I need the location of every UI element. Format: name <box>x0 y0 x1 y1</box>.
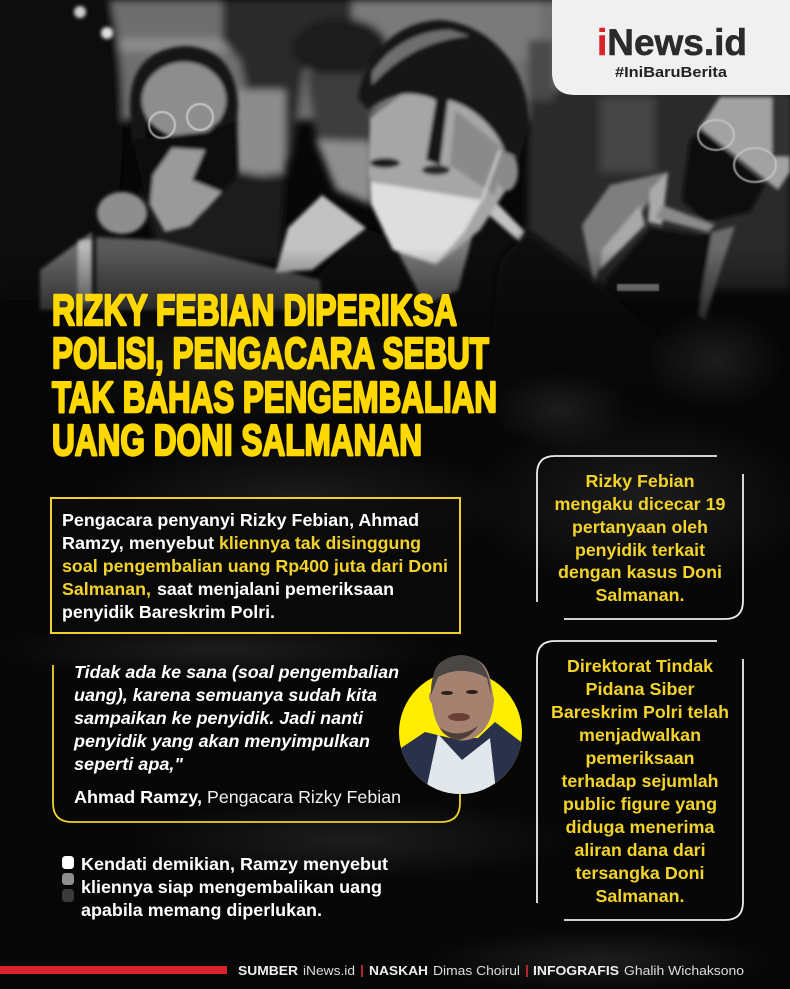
panel: scheduled examinations: Direktorat Tindak <box>567 656 713 676</box>
right person's dark shirt <box>606 228 715 300</box>
panel: scheduled examinations: terhadap sejumlah <box>562 771 718 791</box>
second man's hair and face <box>292 18 388 78</box>
panel: intro summary <box>51 498 460 633</box>
collar <box>488 198 525 242</box>
icon: portrait of Ahmad Ramzy <box>395 655 525 800</box>
zigzag trim <box>78 240 92 302</box>
panel: quote <box>53 662 460 822</box>
panel: bullet note: apabila memang diperlukan. <box>81 900 322 920</box>
footer credits: NASKAH <box>369 963 428 978</box>
white mask <box>370 182 482 264</box>
panel: scheduled examinations: Salmanan. <box>596 886 684 906</box>
right person's plaid shirt <box>582 172 668 285</box>
man two hand <box>150 148 222 232</box>
title: UANG DONI SALMANAN <box>52 416 422 465</box>
panel: quote: seperti apa," <box>74 754 184 774</box>
panel: quote: Tidak ada ke sana (soal pengembalian <box>74 662 399 682</box>
panel: scheduled examinations: aliran dana dari <box>574 840 706 860</box>
photo bottom fade <box>0 248 790 448</box>
logo wordmark: iNews.id <box>597 22 747 63</box>
panel: scheduled examinations: diduga menerima <box>566 817 715 837</box>
panel: scheduled examinations: pemeriksaan <box>586 748 694 768</box>
white shirt <box>276 195 366 272</box>
right background <box>528 90 790 290</box>
main hair <box>358 20 529 165</box>
panel: intro summary: kliennya tak disinggung <box>219 533 421 553</box>
right person's face <box>700 97 790 190</box>
panel: intro summary: Salmanan, <box>62 579 151 599</box>
tan sleeve <box>40 232 92 310</box>
title: POLISI, PENGACARA SEBUT <box>52 329 489 378</box>
panel: 19 questions: pertanyaan oleh <box>572 517 708 537</box>
tagline: #IniBaruBerita <box>615 64 728 81</box>
panel: scheduled examinations: menjadwalkan <box>579 725 701 745</box>
footer credits: INFOGRAFIS <box>533 963 619 978</box>
pale wall lights <box>74 6 86 18</box>
neck <box>398 215 478 305</box>
footer credits: Dimas Choirul <box>433 963 520 978</box>
title: TAK BAHAS PENGEMBALIAN <box>52 373 497 422</box>
panel: quote: Ahmad Ramzy, <box>74 787 202 807</box>
right scarf <box>698 226 735 320</box>
panel background <box>552 0 790 95</box>
panel: 19 questions <box>537 456 743 619</box>
panel: scheduled examinations: public figure yang <box>563 794 717 814</box>
panel: scheduled examinations: Pidana Siber <box>586 679 695 699</box>
eyes <box>370 158 400 168</box>
title: RIZKY FEBIAN DIPERIKSA <box>52 286 457 335</box>
panel: scheduled examinations <box>537 641 743 920</box>
fist <box>97 192 147 234</box>
panel: bullet note <box>62 854 388 920</box>
logo panel <box>552 0 790 95</box>
right person's glasses <box>698 120 734 150</box>
panel: quote: sampaikan ke penyidik. Jadi nanti <box>74 708 364 728</box>
main shoulder overlap <box>480 232 690 440</box>
footer credits: Ghalih Wichaksono <box>624 963 744 978</box>
red accent bar <box>0 966 227 974</box>
panel: bullet note: kliennya siap mengembalikan uang <box>81 877 382 897</box>
panel: intro summary: Pengacara penyanyi Rizky Febian, Ahmad <box>62 510 419 530</box>
faint lower background texture <box>0 305 790 989</box>
MOVIE shirt print <box>617 284 659 291</box>
hero photo: press crowd around Rizky Febian <box>0 0 790 507</box>
footer credits <box>0 963 744 978</box>
panel: scheduled examinations: tersangka Doni <box>576 863 704 883</box>
panel: intro summary: Ramzy, menyebut <box>62 533 214 553</box>
footer credits: iNews.id <box>303 963 355 978</box>
panel: quote: penyidik yang akan menyimpulkan <box>73 731 370 751</box>
panel: quote: Pengacara Rizky Febian <box>207 787 401 807</box>
panel: 19 questions: Rizky Febian <box>586 471 694 491</box>
panel: quote: uang), karena semuanya sudah kita <box>74 685 377 705</box>
footer credits: SUMBER <box>238 963 299 978</box>
back wall <box>100 0 560 120</box>
panel: intro summary: soal pengembalian uang Rp400 juta dari Doni <box>62 556 448 576</box>
panel: 19 questions: dengan kasus Doni <box>558 562 722 582</box>
left foreground shoulder <box>0 0 112 300</box>
panel: 19 questions: penyidik terkait <box>575 540 705 560</box>
column behind man two <box>235 90 285 175</box>
camera rig <box>222 0 352 160</box>
bullet markers <box>62 856 74 869</box>
panel: intro summary: saat menjalani pemeriksaan <box>157 579 394 599</box>
panel: 19 questions: mengaku dicecar 19 <box>554 494 726 514</box>
man two hair <box>130 46 238 145</box>
panel: scheduled examinations: Bareskrim Polri telah <box>551 702 729 722</box>
second man's mask <box>316 140 372 205</box>
panel: bullet note: Kendati demikian, Ramzy menyebut <box>81 854 388 874</box>
right person's mask <box>682 130 765 222</box>
man two body <box>140 170 285 262</box>
man two face <box>142 62 226 138</box>
title <box>52 286 497 465</box>
man two black mask <box>132 122 238 212</box>
main body jacket <box>300 205 640 420</box>
main face <box>368 88 508 262</box>
panel: intro summary: penyidik Bareskrim Polri. <box>62 602 275 622</box>
panel: 19 questions: Salmanan. <box>596 585 684 605</box>
man two glasses <box>149 112 175 138</box>
pillow <box>96 237 322 310</box>
